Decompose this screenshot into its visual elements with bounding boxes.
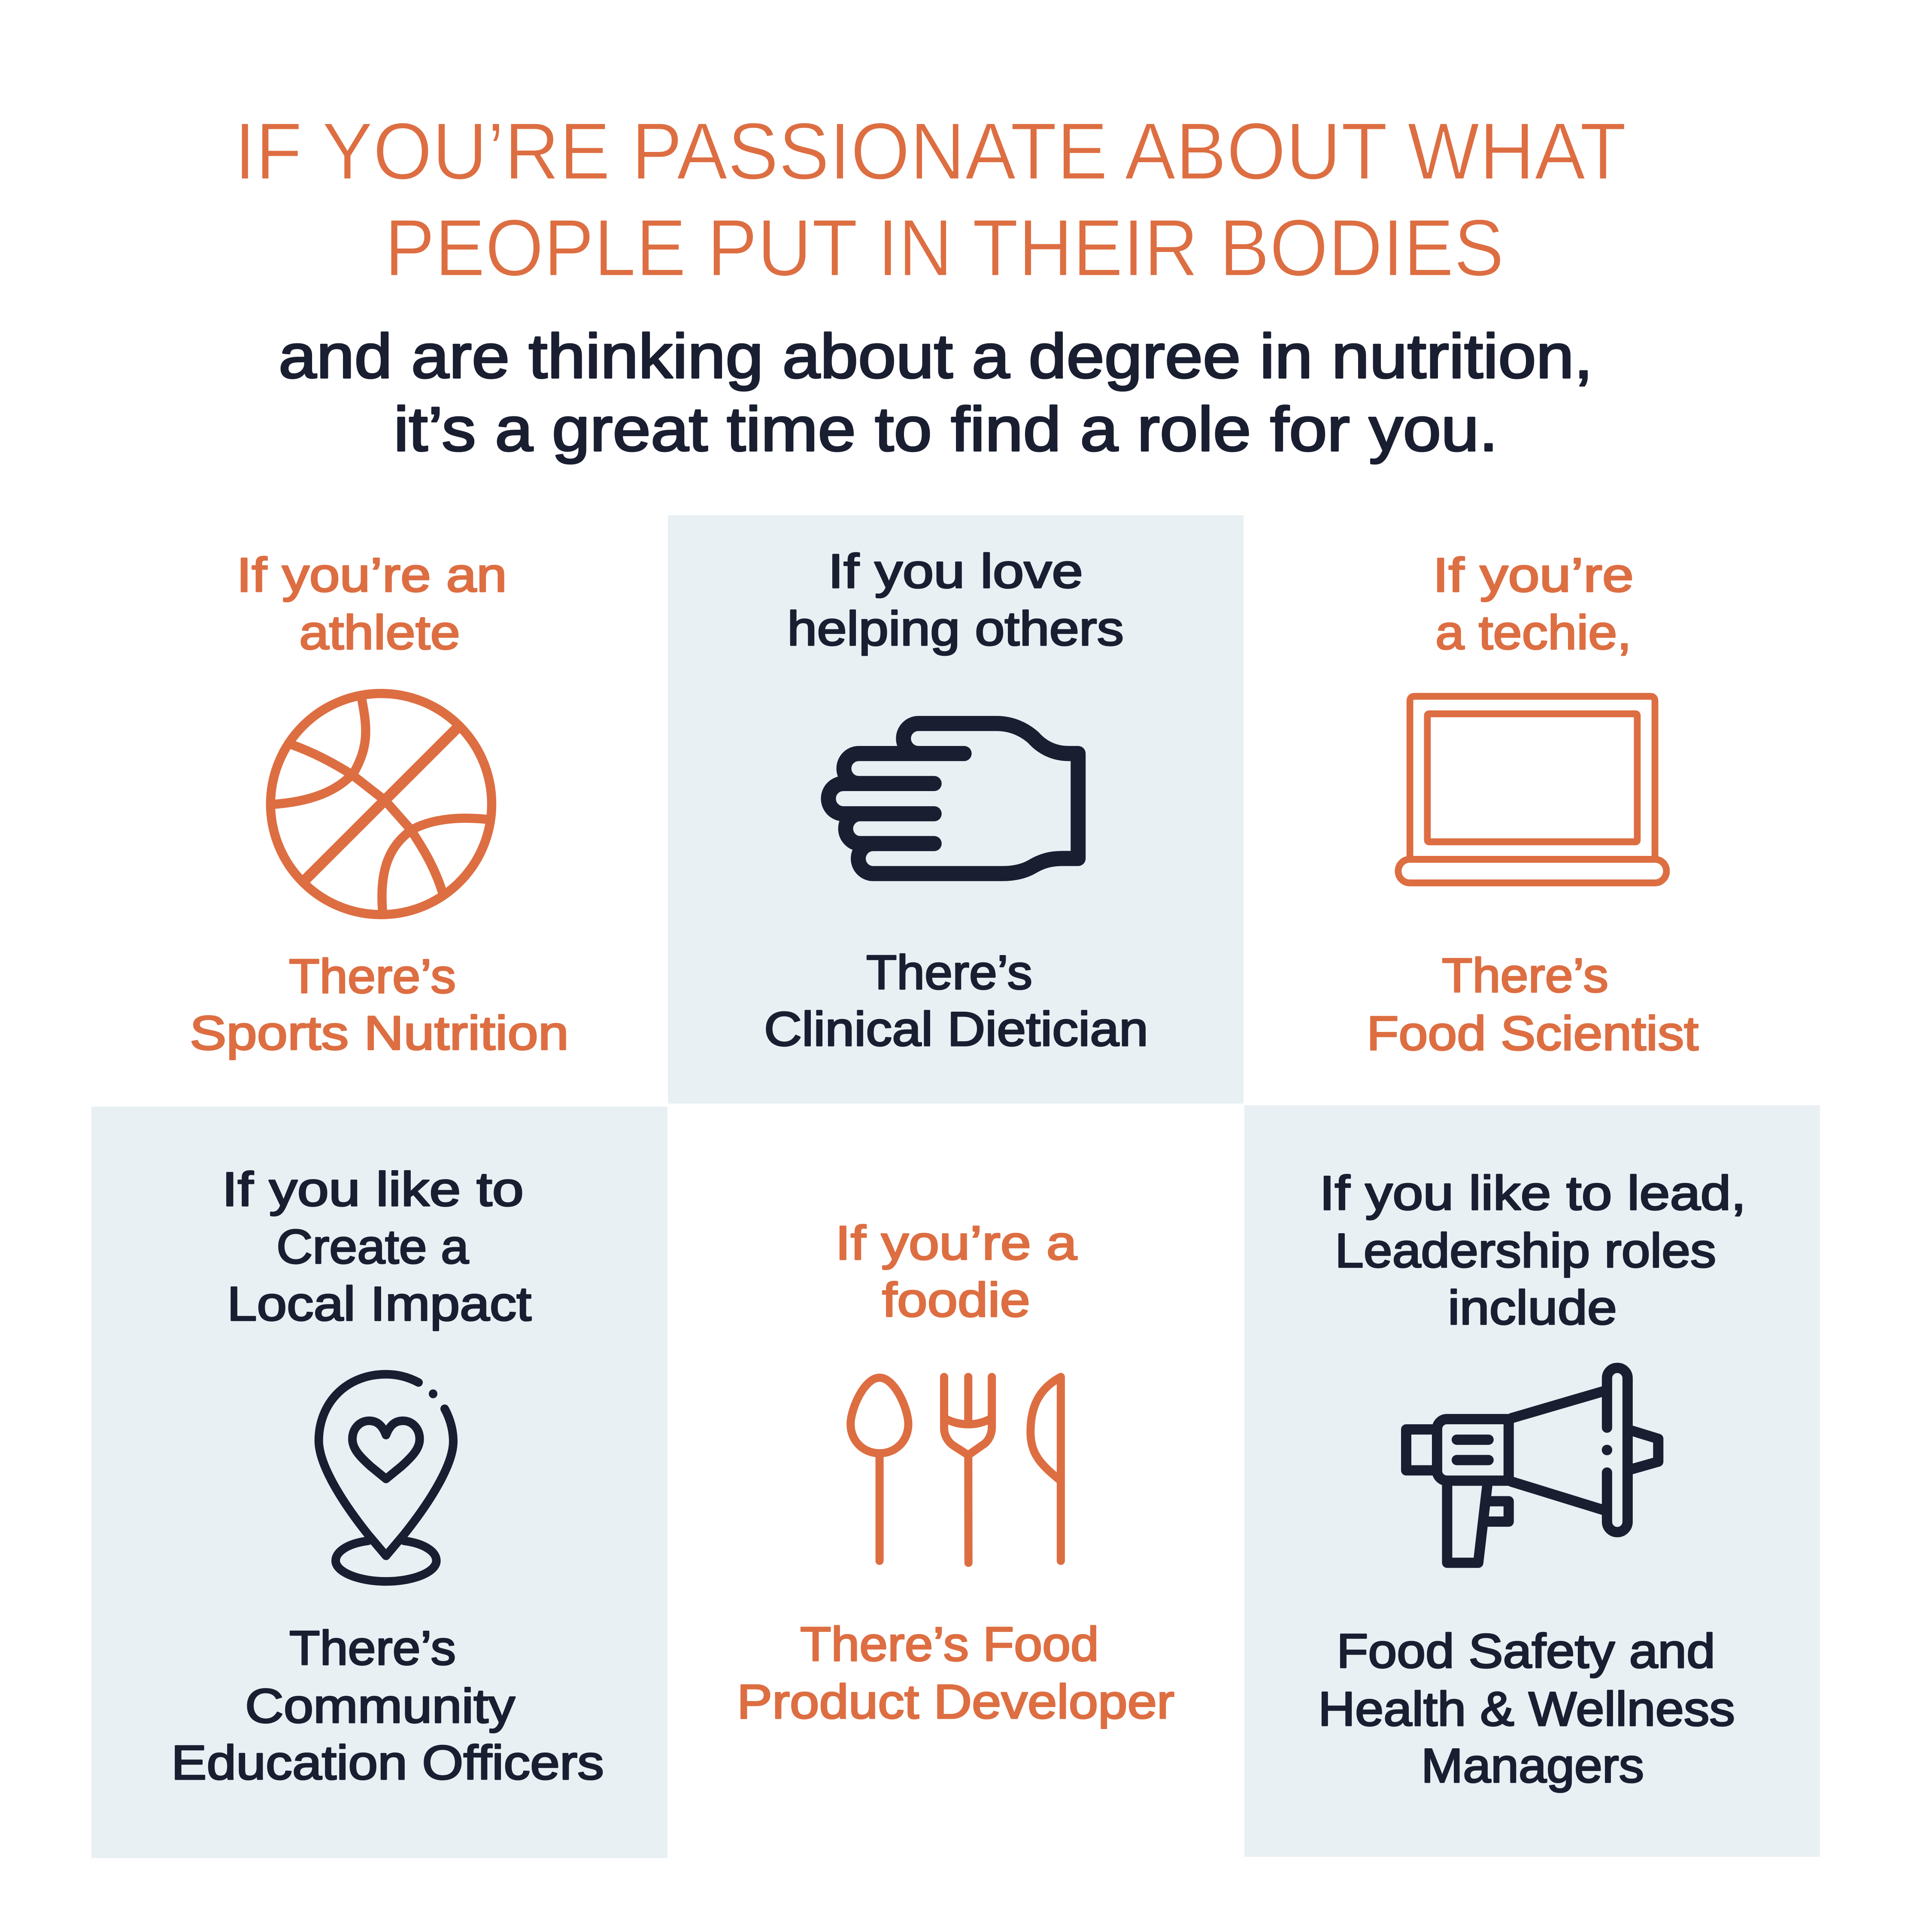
text: techie prompt: If you’re	[1433, 548, 1634, 602]
text: community education role: There’s	[289, 1621, 456, 1675]
text: food safety and wellness role: Food Safety and	[1337, 1624, 1715, 1678]
panel background	[91, 1107, 667, 1858]
text: helping others prompt	[787, 544, 1124, 655]
text: local impact prompt	[222, 1162, 531, 1331]
icon: laptop	[1398, 696, 1666, 883]
panel: sports nutrition	[190, 548, 569, 1060]
text: food product developer role: There’s Food	[800, 1617, 1099, 1671]
text: food safety and wellness role: Managers	[1421, 1739, 1644, 1792]
panel: food product developer	[737, 1216, 1174, 1729]
text: athlete prompt	[237, 548, 507, 659]
text: community education role: Education Officers	[171, 1736, 604, 1789]
panel background	[668, 515, 1244, 1104]
text: clinical dietician role: There’s	[866, 946, 1032, 999]
text: food safety and wellness role: Health & Wellness	[1318, 1682, 1735, 1736]
panel: community education officers	[91, 1107, 667, 1858]
text: sports nutrition role: There’s	[289, 949, 456, 1003]
text: food product developer role	[737, 1617, 1174, 1729]
title	[234, 106, 1626, 293]
icon: location pin with heart	[319, 1374, 453, 1581]
text: community education role: Community	[245, 1679, 515, 1733]
text: leadership prompt: include	[1448, 1281, 1617, 1335]
text: local impact prompt: If you like to	[222, 1162, 524, 1216]
text: clinical dietician role	[764, 946, 1148, 1056]
text: food product developer role: Product Developer	[737, 1675, 1174, 1729]
text: leadership prompt	[1319, 1166, 1746, 1335]
text: athlete prompt: athlete	[299, 606, 460, 659]
text: food scientist role: Food Scientist	[1367, 1007, 1698, 1060]
text: sports nutrition role: Sports Nutrition	[190, 1006, 569, 1060]
title: IF YOU’RE PASSIONATE ABOUT WHAT	[234, 106, 1626, 196]
text: techie prompt: a techie,	[1435, 606, 1632, 659]
text: food scientist role: There’s	[1442, 949, 1608, 1002]
icon: basketball	[270, 694, 491, 915]
text: sports nutrition role	[190, 949, 569, 1060]
panel: clinical dietician	[668, 515, 1244, 1104]
icon: hand	[828, 724, 1078, 873]
text: food scientist role	[1367, 949, 1698, 1060]
panel: leadership roles	[1244, 1105, 1820, 1857]
panel: food scientist	[1367, 548, 1698, 1060]
text: helping others prompt: If you love	[828, 544, 1083, 598]
icon: megaphone	[1406, 1368, 1658, 1563]
text: helping others prompt: helping others	[787, 602, 1124, 655]
text: foodie prompt: foodie	[882, 1273, 1030, 1327]
text: leadership prompt: Leadership roles	[1335, 1224, 1716, 1277]
text: foodie prompt	[835, 1216, 1077, 1327]
panel background	[1244, 1105, 1820, 1857]
text: leadership prompt: If you like to lead,	[1319, 1166, 1746, 1220]
subtitle	[279, 321, 1593, 464]
subtitle: it’s a great time to find a role for you.	[394, 394, 1498, 464]
text: athlete prompt: If you’re an	[237, 548, 507, 602]
text: clinical dietician role: Clinical Dietician	[764, 1002, 1148, 1056]
text: foodie prompt: If you’re a	[835, 1216, 1077, 1270]
text: local impact prompt: Local Impact	[227, 1277, 531, 1331]
subtitle: and are thinking about a degree in nutrition,	[279, 321, 1593, 391]
title: PEOPLE PUT IN THEIR BODIES	[385, 203, 1504, 293]
text: local impact prompt: Create a	[276, 1220, 469, 1274]
icon: cutlery	[851, 1377, 1061, 1563]
text: techie prompt	[1433, 548, 1634, 659]
text: food safety and wellness role	[1318, 1624, 1735, 1792]
text: community education role	[171, 1621, 604, 1789]
